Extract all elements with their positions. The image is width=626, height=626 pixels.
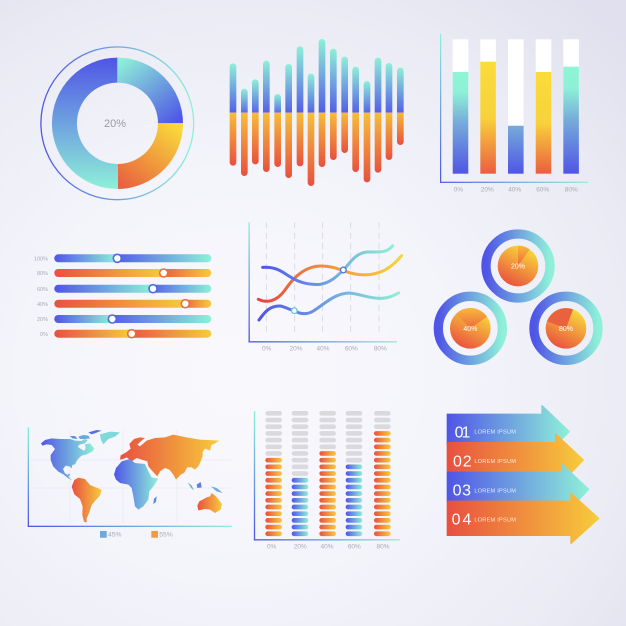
column chart labels: 80% bbox=[565, 186, 578, 194]
slider row 100% bbox=[34, 254, 211, 262]
column chart labels: 60% bbox=[536, 186, 549, 194]
South America bbox=[72, 478, 102, 523]
arrow 03: 03 bbox=[453, 483, 471, 500]
segmented chart labels: 80% bbox=[377, 543, 390, 550]
map legend 55%: 55% bbox=[159, 532, 173, 538]
orange column 0% bbox=[265, 458, 282, 536]
Australia bbox=[197, 493, 222, 513]
map legend 55% bbox=[151, 531, 173, 538]
column chart labels: 40% bbox=[508, 186, 521, 194]
gauge 40% bbox=[438, 296, 502, 360]
column chart labels: 0% bbox=[454, 186, 463, 194]
column chart labels: 20% bbox=[481, 186, 494, 194]
line chart labels: 60% bbox=[345, 346, 358, 353]
segmented chart labels: 0% bbox=[267, 543, 277, 550]
line chart labels: 80% bbox=[374, 346, 387, 353]
slider row 80%: 80% bbox=[37, 271, 48, 277]
arrow 02: 02 bbox=[453, 453, 472, 470]
slider row 20%: 20% bbox=[37, 317, 48, 323]
panel: donut chart bbox=[41, 47, 194, 200]
segmented chart axes bbox=[254, 411, 400, 540]
North America bbox=[41, 438, 94, 480]
slider row 80% bbox=[37, 269, 211, 277]
slider row 20% bbox=[37, 315, 211, 323]
column chart axes bbox=[440, 34, 588, 183]
slider row 60%: 60% bbox=[37, 287, 48, 293]
Madagascar bbox=[153, 496, 157, 504]
donut outer ring bbox=[41, 47, 194, 200]
curve: red to yellow bbox=[258, 256, 402, 301]
slider row 40% bbox=[37, 300, 211, 308]
panel: world map bbox=[28, 427, 232, 538]
arrow 02 bbox=[447, 434, 583, 472]
map grid bbox=[30, 430, 231, 523]
segmented chart labels: 40% bbox=[321, 543, 334, 550]
line chart labels bbox=[262, 346, 387, 353]
panel: waveform bar chart bbox=[230, 39, 404, 186]
donut segment: left half bbox=[52, 58, 118, 189]
donut segment: bottom right bbox=[118, 123, 183, 189]
curve: blue to teal lower bbox=[259, 293, 399, 320]
line chart dashed guides bbox=[266, 222, 379, 335]
arrow 04: LOREM IPSUM bbox=[474, 517, 516, 523]
panel: arrow list bbox=[447, 406, 599, 543]
gauge 20%: 20% bbox=[511, 264, 525, 271]
map legend 45% bbox=[100, 531, 121, 538]
Africa bbox=[114, 459, 158, 510]
Indonesia and New Guinea bbox=[188, 482, 223, 493]
column tracks bbox=[453, 39, 579, 174]
blue column 60% bbox=[346, 464, 362, 536]
donut centre label: 20% bbox=[104, 118, 126, 130]
line chart labels: 40% bbox=[317, 346, 330, 353]
column chart labels bbox=[454, 186, 578, 194]
arrow 01: 01 bbox=[455, 424, 470, 441]
map legend 45%: 45% bbox=[108, 532, 121, 538]
slider row 40%: 40% bbox=[37, 302, 48, 308]
slider row 60% bbox=[37, 285, 211, 293]
empty segments bbox=[265, 411, 391, 476]
arrow 02: LOREM IPSUM bbox=[474, 459, 516, 465]
blue column 20% bbox=[292, 478, 308, 536]
line chart axes bbox=[248, 222, 397, 342]
curve: blue to teal upper bbox=[263, 246, 393, 284]
waveform upper bars bbox=[230, 39, 404, 117]
arrow 03 bbox=[447, 464, 589, 501]
slider row 0% bbox=[40, 330, 211, 338]
arrow 04: 04 bbox=[452, 512, 471, 529]
panel: slider chart bbox=[34, 254, 211, 338]
orange column 40% bbox=[319, 451, 336, 536]
Americas group bbox=[41, 430, 120, 523]
arrow 01 bbox=[447, 406, 569, 458]
gauge 80%: 80% bbox=[559, 326, 573, 333]
slider row 0%: 0% bbox=[40, 332, 48, 338]
gauge 20% bbox=[486, 234, 550, 298]
line chart labels: 20% bbox=[290, 346, 303, 353]
segmented chart labels bbox=[267, 543, 390, 550]
slider row 100%: 100% bbox=[34, 256, 48, 262]
panel: three ring gauges bbox=[438, 234, 598, 360]
segmented chart labels: 60% bbox=[348, 543, 361, 550]
panel: segmented bar chart bbox=[254, 411, 400, 550]
arrow 01: LOREM IPSUM bbox=[474, 430, 516, 436]
segmented chart labels: 20% bbox=[294, 543, 307, 550]
line chart labels: 0% bbox=[262, 346, 272, 353]
panel: line chart bbox=[248, 222, 402, 353]
panel: stacked column chart bbox=[440, 34, 588, 194]
arrow 03: LOREM IPSUM bbox=[474, 488, 516, 494]
orange column 80% bbox=[374, 431, 391, 536]
Greenland and Arctic islands bbox=[70, 430, 120, 444]
gauge 80% bbox=[534, 296, 598, 360]
map axes bbox=[28, 427, 232, 527]
Old World group bbox=[114, 435, 223, 513]
column fills bbox=[453, 62, 579, 174]
donut segment: top right bbox=[117, 58, 183, 123]
waveform lower bars bbox=[230, 109, 404, 186]
arrow 04 bbox=[447, 493, 599, 543]
Eurasia bbox=[120, 435, 219, 480]
line marker lower bbox=[291, 308, 297, 313]
line marker upper bbox=[340, 267, 346, 273]
gauge 40%: 40% bbox=[463, 326, 477, 333]
